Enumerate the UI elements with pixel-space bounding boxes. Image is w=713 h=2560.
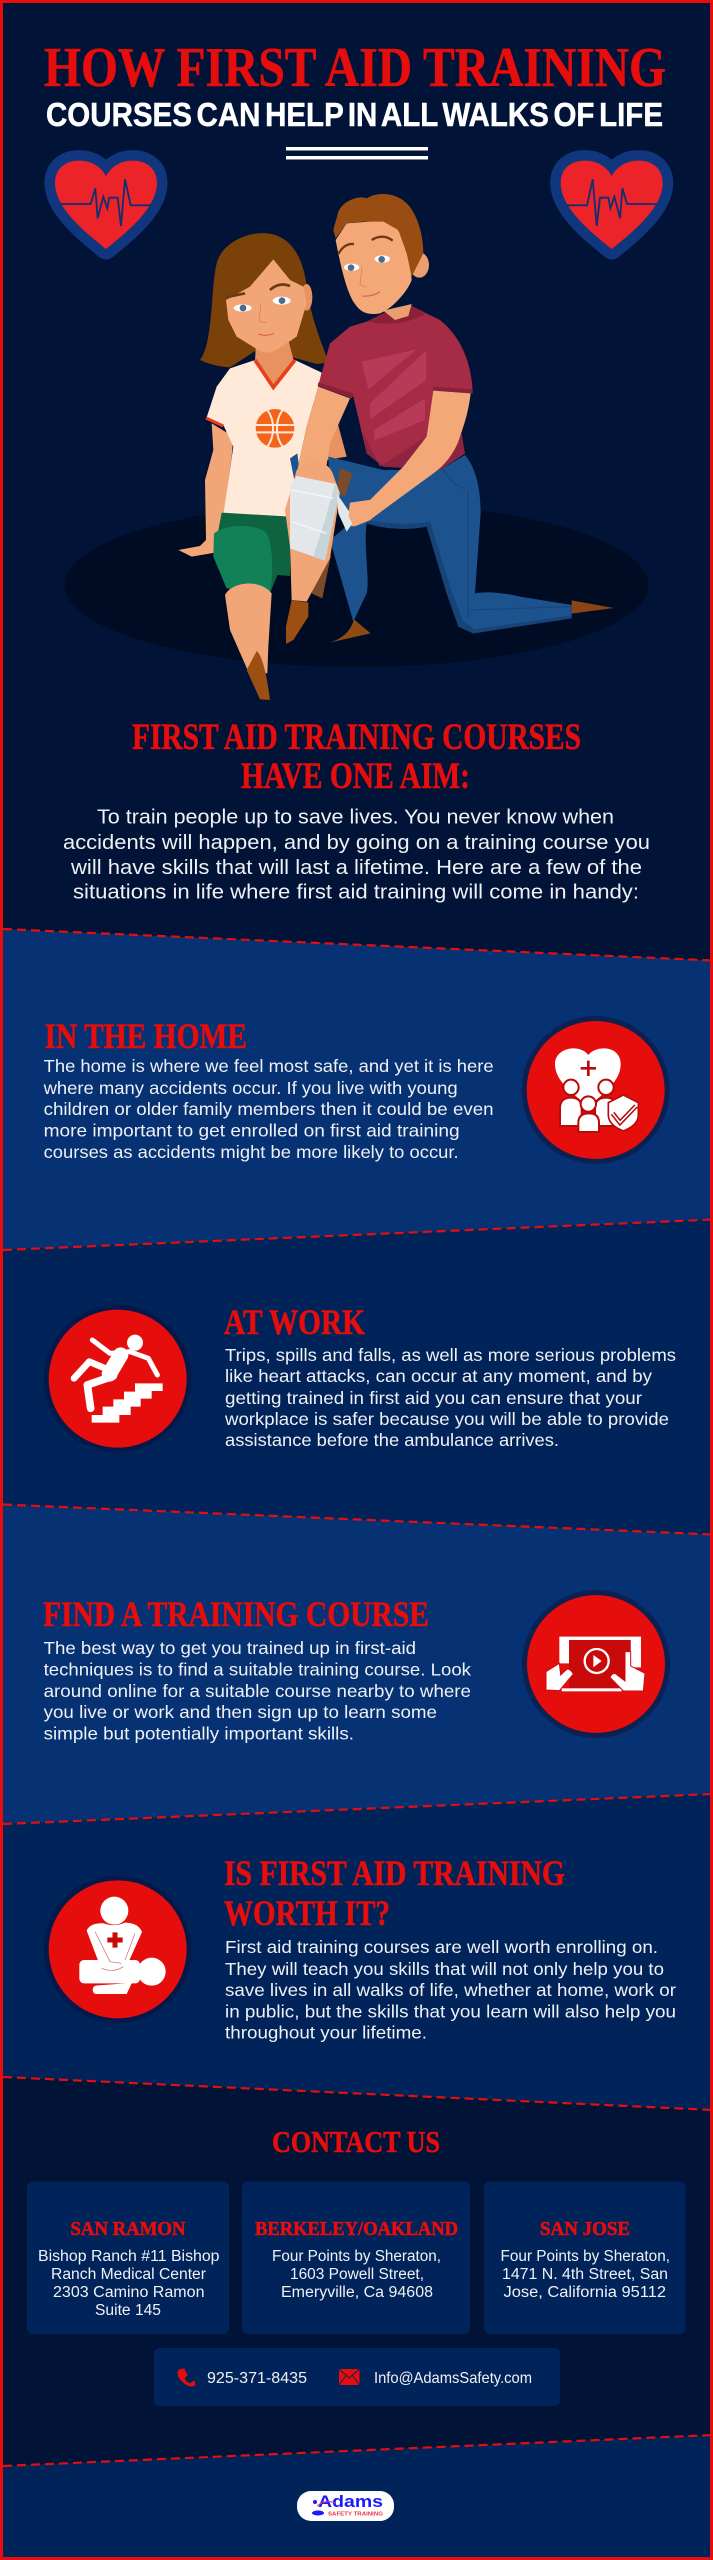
intro text: To train people up to save lives. You never know when (97, 806, 614, 828)
girl t-shirt (207, 360, 322, 517)
text: is first aid training worth it: save lives in all walks of life, whether at home, work or (225, 1980, 676, 2000)
girl far arm (327, 413, 347, 460)
girl shorts (213, 513, 290, 593)
panel: in the home (0, 929, 713, 1250)
text: is first aid training worth it: in public, but the skills that you learn will also help you (225, 2002, 676, 2022)
icon: heart with pulse right (561, 161, 663, 249)
card: San Ramon: Suite 145 (95, 2302, 161, 2319)
icon: falling on stairs (44, 1305, 192, 1453)
logo: Adams Safety Training: Adams (318, 2492, 383, 2511)
text: find a training course: techniques is to find a suitable training course. Look (44, 1660, 471, 1680)
man facial features (338, 237, 393, 296)
icon: family protection (522, 1016, 670, 1164)
girl ear (301, 284, 312, 311)
text: in the home: The home is where we feel most safe, and yet it is here (44, 1056, 494, 1076)
girl left shoe (247, 651, 270, 700)
man rear shoe (572, 600, 614, 614)
text: at work: workplace is safer because you will be able to provide (224, 1409, 669, 1429)
man near arm (348, 391, 471, 527)
intro text: situations in life where first aid training will come in handy: (73, 880, 639, 904)
card: San Ramon: Bishop Ranch #11 Bishop (38, 2248, 220, 2265)
card: San Jose: Four Points by Sheraton, (500, 2248, 670, 2265)
panel: footer logo band (0, 2435, 713, 2560)
heading: is first aid training worth it: WORTH IT? (224, 1893, 390, 1933)
intro heading: FIRST AID TRAINING COURSES (132, 717, 581, 758)
intro heading (132, 717, 581, 797)
girl near arm and hand (178, 423, 233, 557)
text: is first aid training worth it: First aid training courses are well worth enrolling on. (225, 1937, 658, 1957)
text: at work: Trips, spills and falls, as well as more serious problems (225, 1345, 676, 1365)
intro text: will have skills that will last a lifetime. Here are a few of the (70, 856, 642, 879)
pants peek behind knee (290, 453, 300, 478)
icon: envelope (339, 2369, 360, 2385)
text: at work: getting trained in first aid you can ensure that your (225, 1388, 642, 1408)
heading: at work: AT WORK (224, 1302, 365, 1342)
girl left leg (225, 583, 272, 673)
splint (312, 468, 352, 598)
text: find a training course: around online for a suitable course nearby to where (44, 1681, 471, 1701)
man hand (349, 499, 373, 527)
panel: find a training course (0, 1504, 713, 1824)
email address: Info@AdamsSafety.com (374, 2370, 532, 2387)
man face (336, 220, 412, 314)
text: at work (224, 1345, 676, 1450)
heading: is first aid training worth it (224, 1853, 565, 1933)
title double rule (286, 147, 428, 160)
text: at work: like heart attacks, can occur at any moment, and by (225, 1366, 652, 1386)
man neck (383, 304, 412, 320)
heading: find a training course: FIND A TRAINING COURSE (43, 1594, 429, 1634)
heading: in the home: IN THE HOME (44, 1016, 247, 1056)
girl raised leg (285, 462, 340, 602)
card: Berkeley/Oakland (242, 2182, 470, 2334)
girl facial features (226, 285, 291, 335)
heading: is first aid training worth it: IS FIRST AID TRAINING (224, 1853, 565, 1893)
icon: tablet video (522, 1590, 670, 1738)
ground shadow ellipse (64, 503, 648, 667)
icon: CPR (44, 1875, 192, 2023)
card: San Jose: SAN JOSE (540, 2218, 630, 2240)
text: find a training course: The best way to get you trained up in first-aid (44, 1638, 416, 1658)
intro block (63, 717, 650, 904)
text: find a training course: simple but potentially important skills. (44, 1724, 354, 1744)
card: San Ramon: Ranch Medical Center (51, 2266, 206, 2283)
panel: at work (0, 1220, 713, 1534)
man hair (333, 194, 423, 277)
text: at work: assistance before the ambulance arrives. (225, 1430, 559, 1450)
panel: contact us (27, 2124, 686, 2406)
man ear (410, 252, 429, 278)
man far arm (297, 387, 350, 473)
bandage (290, 476, 339, 561)
text: find a training course (44, 1638, 471, 1744)
text: is first aid training worth it (225, 1937, 676, 2042)
icon: heart with pulse left (55, 161, 157, 249)
card: San Ramon: 2303 Camino Ramon (53, 2284, 204, 2301)
intro text: accidents will happen, and by going on a training course you (63, 831, 650, 854)
text: is first aid training worth it: They will teach you skills that will not only help you to (225, 1959, 664, 1979)
icon: phone (178, 2369, 195, 2386)
illustration: man bandaging girl's leg (178, 194, 614, 700)
text: in the home: children or older family members then it could be even (44, 1099, 494, 1119)
header: title block (44, 37, 666, 160)
text: in the home: where many accidents occur. If you live with young (43, 1078, 458, 1098)
card: San Jose (484, 2182, 686, 2334)
card: San Jose: 1471 N. 4th Street, San (502, 2266, 668, 2283)
girl hair (200, 233, 329, 367)
text: find a training course: you live or work and then sign up to learn some (44, 1702, 437, 1722)
man pants (328, 455, 572, 633)
bandage loose end (337, 493, 355, 532)
intro text (63, 806, 650, 904)
card: San Jose: Jose, California 95112 (504, 2284, 666, 2301)
basketball logo (256, 409, 294, 448)
card: Berkeley/Oakland: Four Points by Sheraton, (272, 2248, 441, 2265)
girl neck (255, 340, 294, 389)
card: Berkeley/Oakland: 1603 Powell Street, (290, 2266, 424, 2283)
logo: Adams Safety Training: SAFETY TRAINING (328, 2512, 383, 2518)
text: in the home: courses as accidents might be more likely to occur. (44, 1142, 459, 1162)
man front shoe (329, 619, 371, 643)
heading: contact us: CONTACT US (272, 2124, 440, 2159)
contact bar (154, 2348, 560, 2406)
card: Berkeley/Oakland: BERKELEY/OAKLAND (255, 2218, 458, 2240)
card: San Ramon: SAN RAMON (70, 2218, 186, 2240)
girl face (226, 259, 307, 352)
shirt light patches (362, 349, 426, 441)
phone number: 925-371-8435 (207, 2370, 307, 2387)
intro heading: HAVE ONE AIM: (241, 756, 470, 797)
text: is first aid training worth it: throughout your lifetime. (225, 2022, 427, 2042)
text: in the home (43, 1056, 494, 1162)
panel: is first aid training worth it (0, 1794, 713, 2110)
card: San Ramon (27, 2182, 229, 2334)
man shirt (318, 306, 473, 470)
card: Berkeley/Oakland: Emeryville, Ca 94608 (281, 2284, 433, 2301)
girl raised shoe (286, 600, 308, 644)
logo: Adams Safety Training (297, 2491, 394, 2521)
text: in the home: more important to get enrolled on first aid training (44, 1120, 460, 1140)
